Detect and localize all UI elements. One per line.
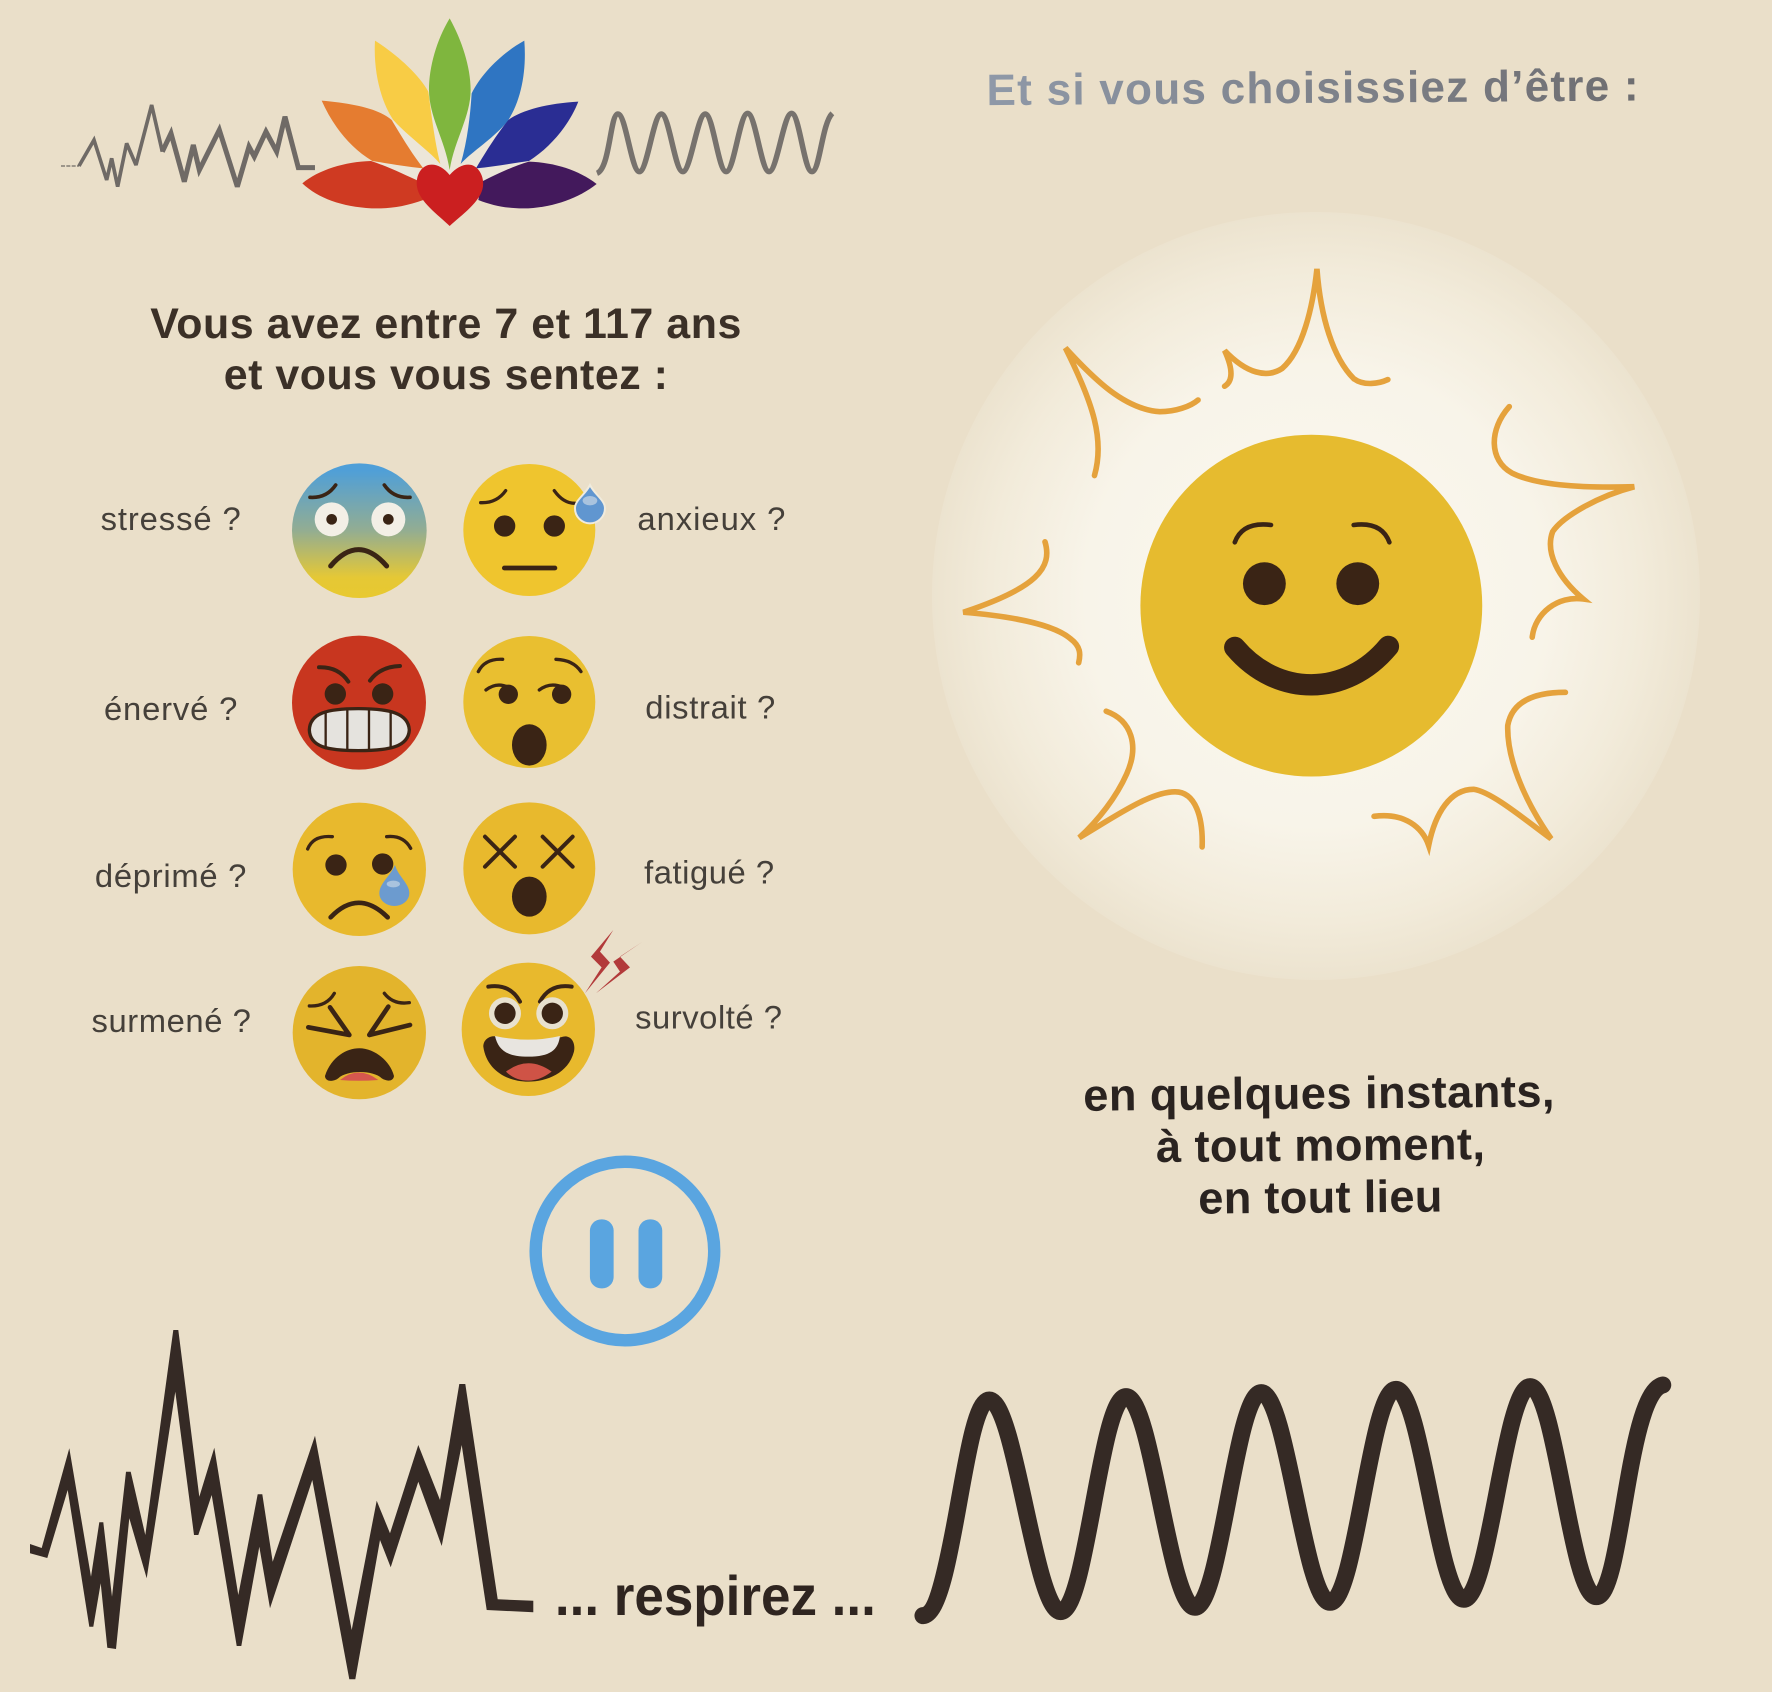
heading: age question: [150, 300, 741, 399]
logo: rainbow lotus with heart: [302, 18, 597, 226]
heading: age question: et vous vous sentez :: [224, 351, 668, 399]
emoji: tired: [463, 802, 595, 934]
small chaotic line: [61, 105, 315, 187]
petal: orange: [322, 101, 423, 168]
emoji: overexcited with lightning: [462, 930, 643, 1096]
heading: right top: Et si vous choisissiez d’être :: [986, 62, 1639, 115]
text: in a few moments: en quelques instants,: [1083, 1066, 1555, 1121]
sun glow: [932, 212, 1700, 980]
heart: [417, 165, 483, 226]
emoji: depressed: [293, 803, 426, 936]
sun rays: [963, 269, 1634, 847]
petal: red: [302, 161, 423, 208]
small calm wave: [597, 113, 832, 173]
petal: yellow: [375, 41, 440, 164]
emotion labels: survolté ?: [635, 998, 782, 1035]
text: in a few moments: [1083, 1066, 1556, 1225]
emoji: overworked: [293, 966, 426, 1099]
emoji: distracted: [463, 636, 595, 768]
petal: navy: [476, 102, 578, 168]
petal: purple: [478, 162, 597, 208]
sun smiley: [963, 269, 1634, 847]
petal: blue: [461, 41, 525, 164]
petal: green: [429, 18, 471, 170]
heading: age question: Vous avez entre 7 et 117 ans: [150, 300, 741, 348]
text: in a few moments: à tout moment,: [1156, 1118, 1485, 1172]
text: breathe: ... respirez ...: [555, 1565, 876, 1627]
emotion labels: surmené ?: [92, 1002, 251, 1039]
emotion labels: distrait ?: [645, 689, 775, 726]
sun face: [1140, 435, 1482, 777]
emoji: stressed: [292, 463, 427, 598]
emoji: anxious: [463, 464, 605, 596]
icon: pause button: [536, 1162, 714, 1340]
emotion labels: énervé ?: [104, 690, 237, 727]
large chaotic line: [30, 1330, 533, 1679]
large calm wave: [923, 1385, 1663, 1616]
emotion labels: [92, 500, 785, 1039]
emotion labels: anxieux ?: [637, 500, 785, 537]
emotion labels: stressé ?: [101, 500, 241, 537]
emotion labels: déprimé ?: [95, 857, 246, 894]
emotion labels: fatigué ?: [644, 854, 774, 891]
text: in a few moments: en tout lieu: [1198, 1171, 1443, 1224]
emoji: angry: [292, 636, 426, 770]
